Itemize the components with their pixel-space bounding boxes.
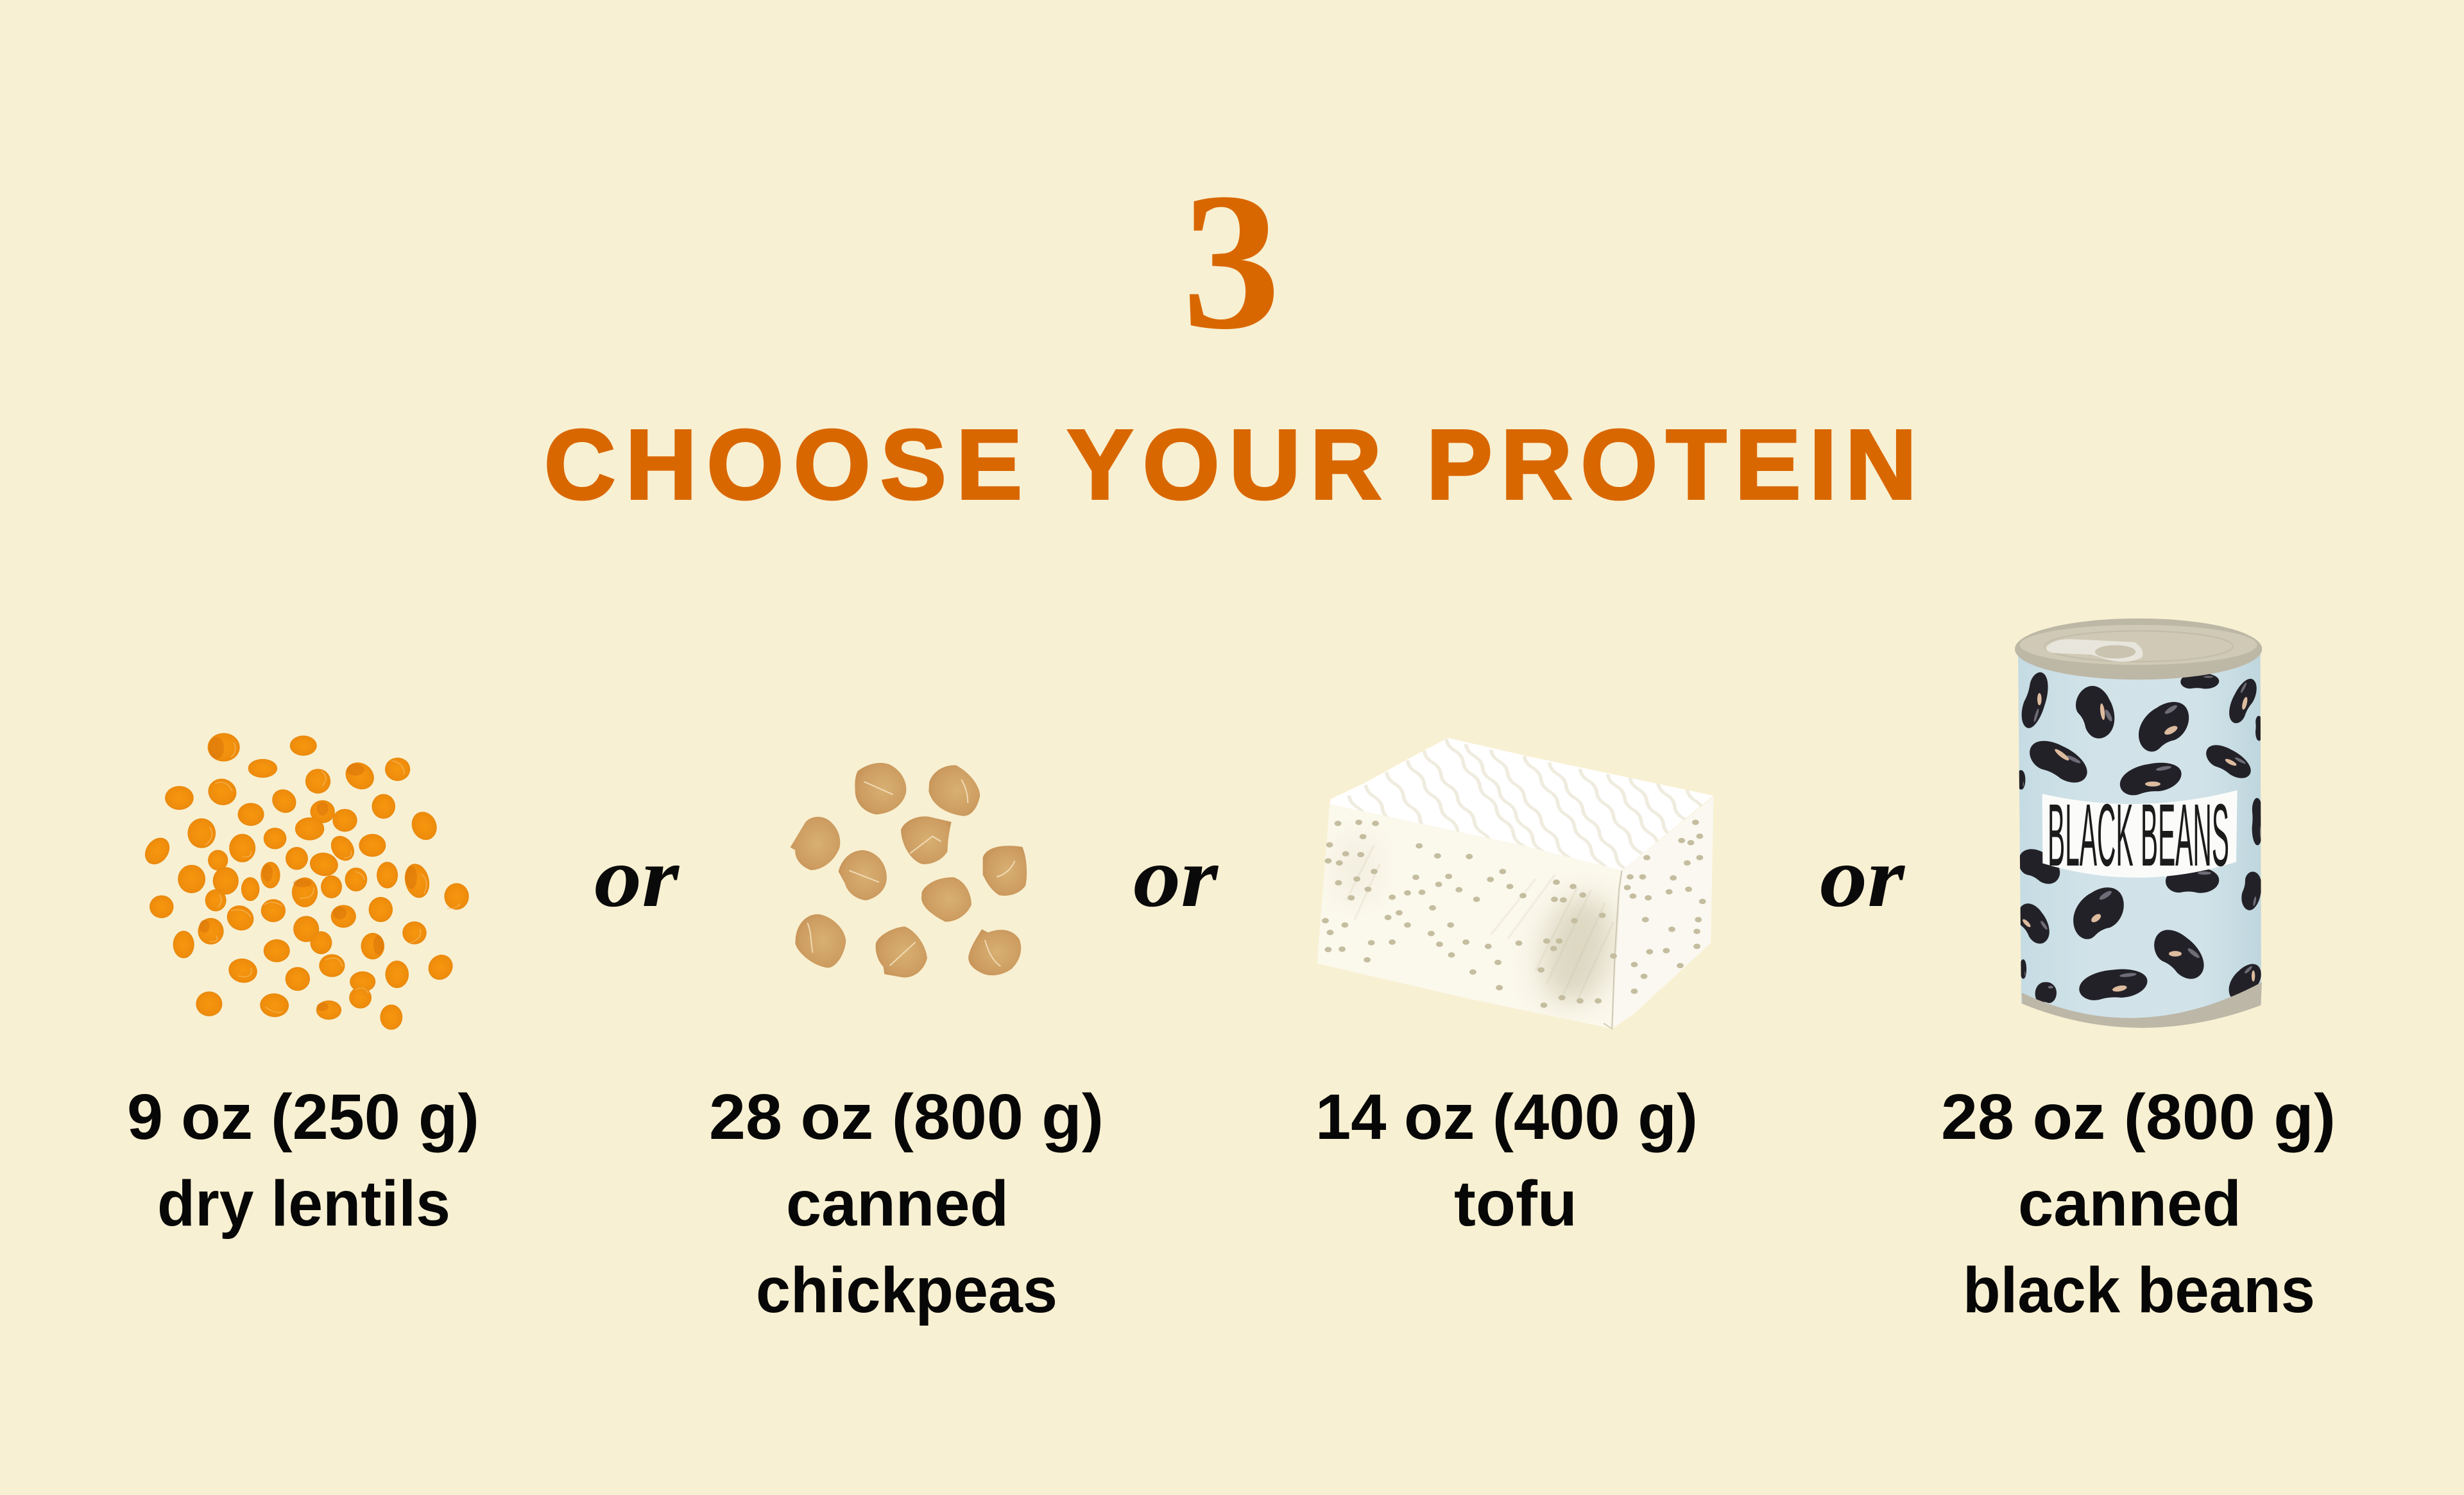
icon: chickpeas [791, 763, 1027, 977]
heading [544, 409, 1917, 520]
can lid [2020, 625, 2257, 665]
step number: 3 [1182, 153, 1281, 370]
can lid rim [2015, 619, 2262, 679]
icon: lentils [141, 733, 469, 1030]
tofu top face [1330, 738, 1713, 870]
icon: can of black beans [2014, 619, 2265, 1028]
heading: YOUR [1067, 409, 1382, 520]
label: black beans: canned [2018, 1168, 2241, 1240]
label: chickpeas [709, 1081, 1104, 1326]
label: chickpeas: canned [786, 1168, 1009, 1240]
label: black beans: 28 oz (800 g) [1941, 1081, 2336, 1153]
label: lentils: 9 oz (250 g) [127, 1081, 479, 1153]
or separator 2: or [1133, 830, 1219, 925]
label: black beans [1941, 1081, 2336, 1326]
icon: tofu block [1317, 738, 1713, 1030]
beans on the can [2014, 669, 2265, 1005]
label: tofu [1315, 1081, 1698, 1240]
label: chickpeas: 28 oz (800 g) [709, 1081, 1104, 1153]
pull tab [2046, 639, 2143, 662]
label: chickpeas: chickpeas [756, 1254, 1057, 1326]
or separator 1: or [594, 830, 680, 925]
can label [2042, 790, 2237, 878]
label: lentils: dry lentils [157, 1168, 450, 1240]
tofu front face [1317, 804, 1621, 1029]
can bottom rim [2022, 982, 2262, 1028]
tofu right face [1612, 797, 1714, 1029]
or separator 3: or [1820, 830, 1906, 925]
label: black beans: black beans [1963, 1254, 2315, 1326]
heading: PROTEIN [1426, 409, 1917, 520]
heading: CHOOSE [544, 409, 1022, 520]
can body [2018, 651, 2261, 1026]
label: tofu: tofu [1454, 1168, 1577, 1240]
label: lentils [127, 1081, 479, 1240]
label: tofu: 14 oz (400 g) [1315, 1081, 1698, 1153]
